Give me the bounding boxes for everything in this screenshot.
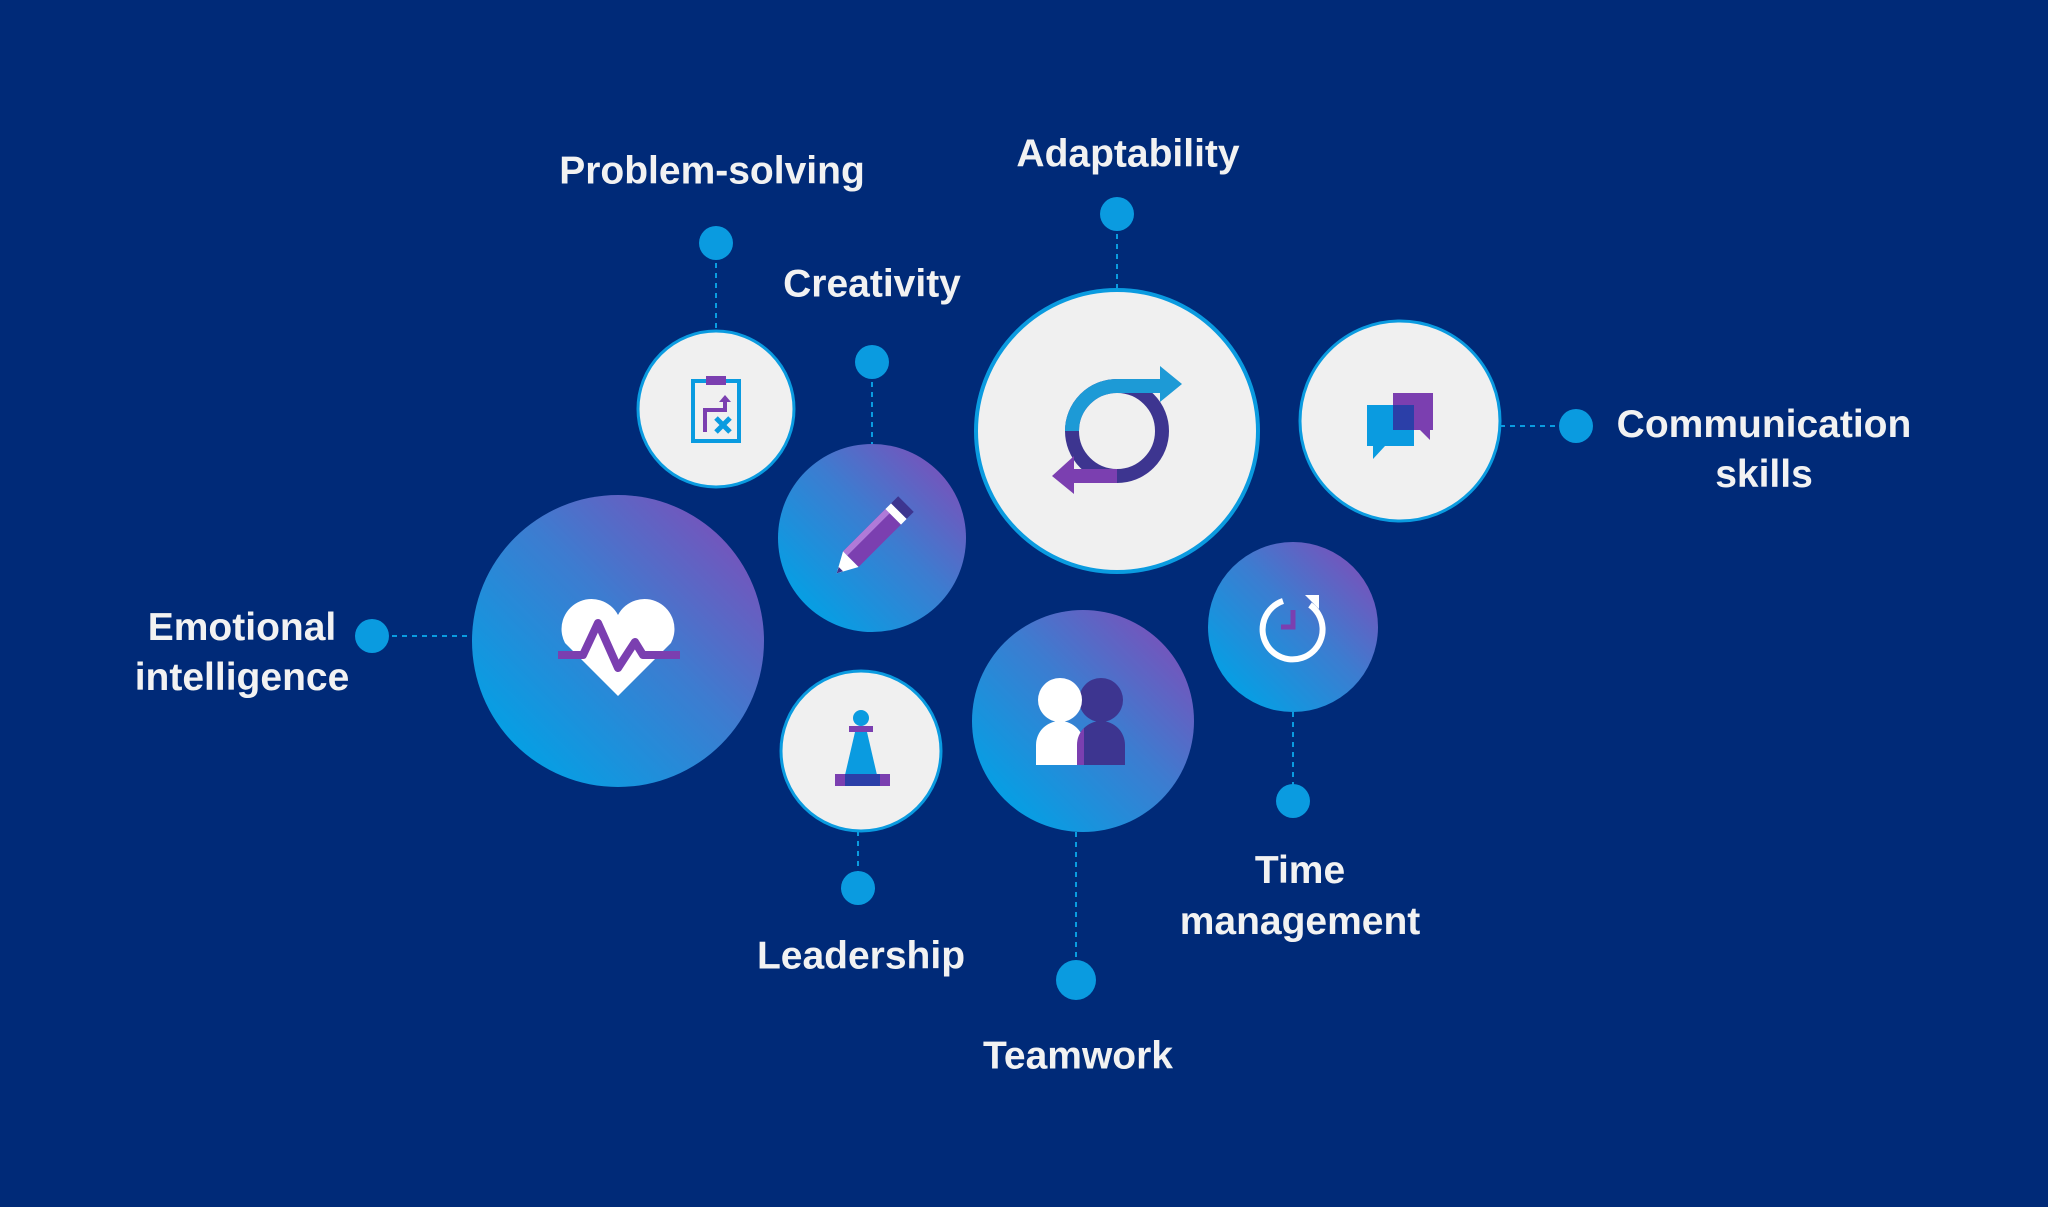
- icon: chess pawn: [835, 710, 890, 786]
- panel: time management: [1208, 542, 1378, 712]
- heading: problem-solving: Problem-solving: [559, 149, 865, 192]
- heading: teamwork: Teamwork: [983, 1034, 1173, 1077]
- heading: emotional intelligence: intelligence: [135, 656, 349, 699]
- heading: time management: Time: [1255, 849, 1345, 892]
- icon: pencil: [829, 496, 914, 581]
- panel: adaptability: [976, 290, 1258, 572]
- panel: teamwork: [972, 610, 1194, 832]
- panel: leadership: [781, 671, 941, 831]
- panel: problem-solving: [638, 331, 794, 487]
- dot: creativity: [855, 345, 889, 379]
- icon: clock arrow: [1263, 595, 1323, 659]
- heading: leadership: Leadership: [757, 934, 965, 977]
- panel: creativity: [778, 444, 966, 632]
- heading: time management: management: [1180, 900, 1420, 943]
- icon: chat bubbles: [1367, 393, 1433, 459]
- panel: communication: [1300, 321, 1500, 521]
- dot: problem-solving: [699, 226, 733, 260]
- heading: creativity: Creativity: [783, 262, 961, 305]
- dot: teamwork: [1056, 960, 1096, 1000]
- icon: cycle arrows: [1052, 366, 1182, 494]
- dot: communication: [1559, 409, 1593, 443]
- heading: communication skills: Communication: [1617, 403, 1911, 446]
- icon: clipboard: [693, 376, 739, 441]
- icon: heart: [558, 599, 680, 696]
- panel: emotional intelligence: [472, 495, 764, 787]
- heading: communication skills: skills: [1715, 453, 1813, 496]
- heading: emotional intelligence: Emotional: [148, 606, 336, 649]
- dot: adaptability: [1100, 197, 1134, 231]
- dot: time management: [1276, 784, 1310, 818]
- heading: adaptability: Adaptability: [1016, 132, 1240, 175]
- dot: leadership: [841, 871, 875, 905]
- dot: emotional intelligence: [355, 619, 389, 653]
- icon: people: [1036, 678, 1125, 765]
